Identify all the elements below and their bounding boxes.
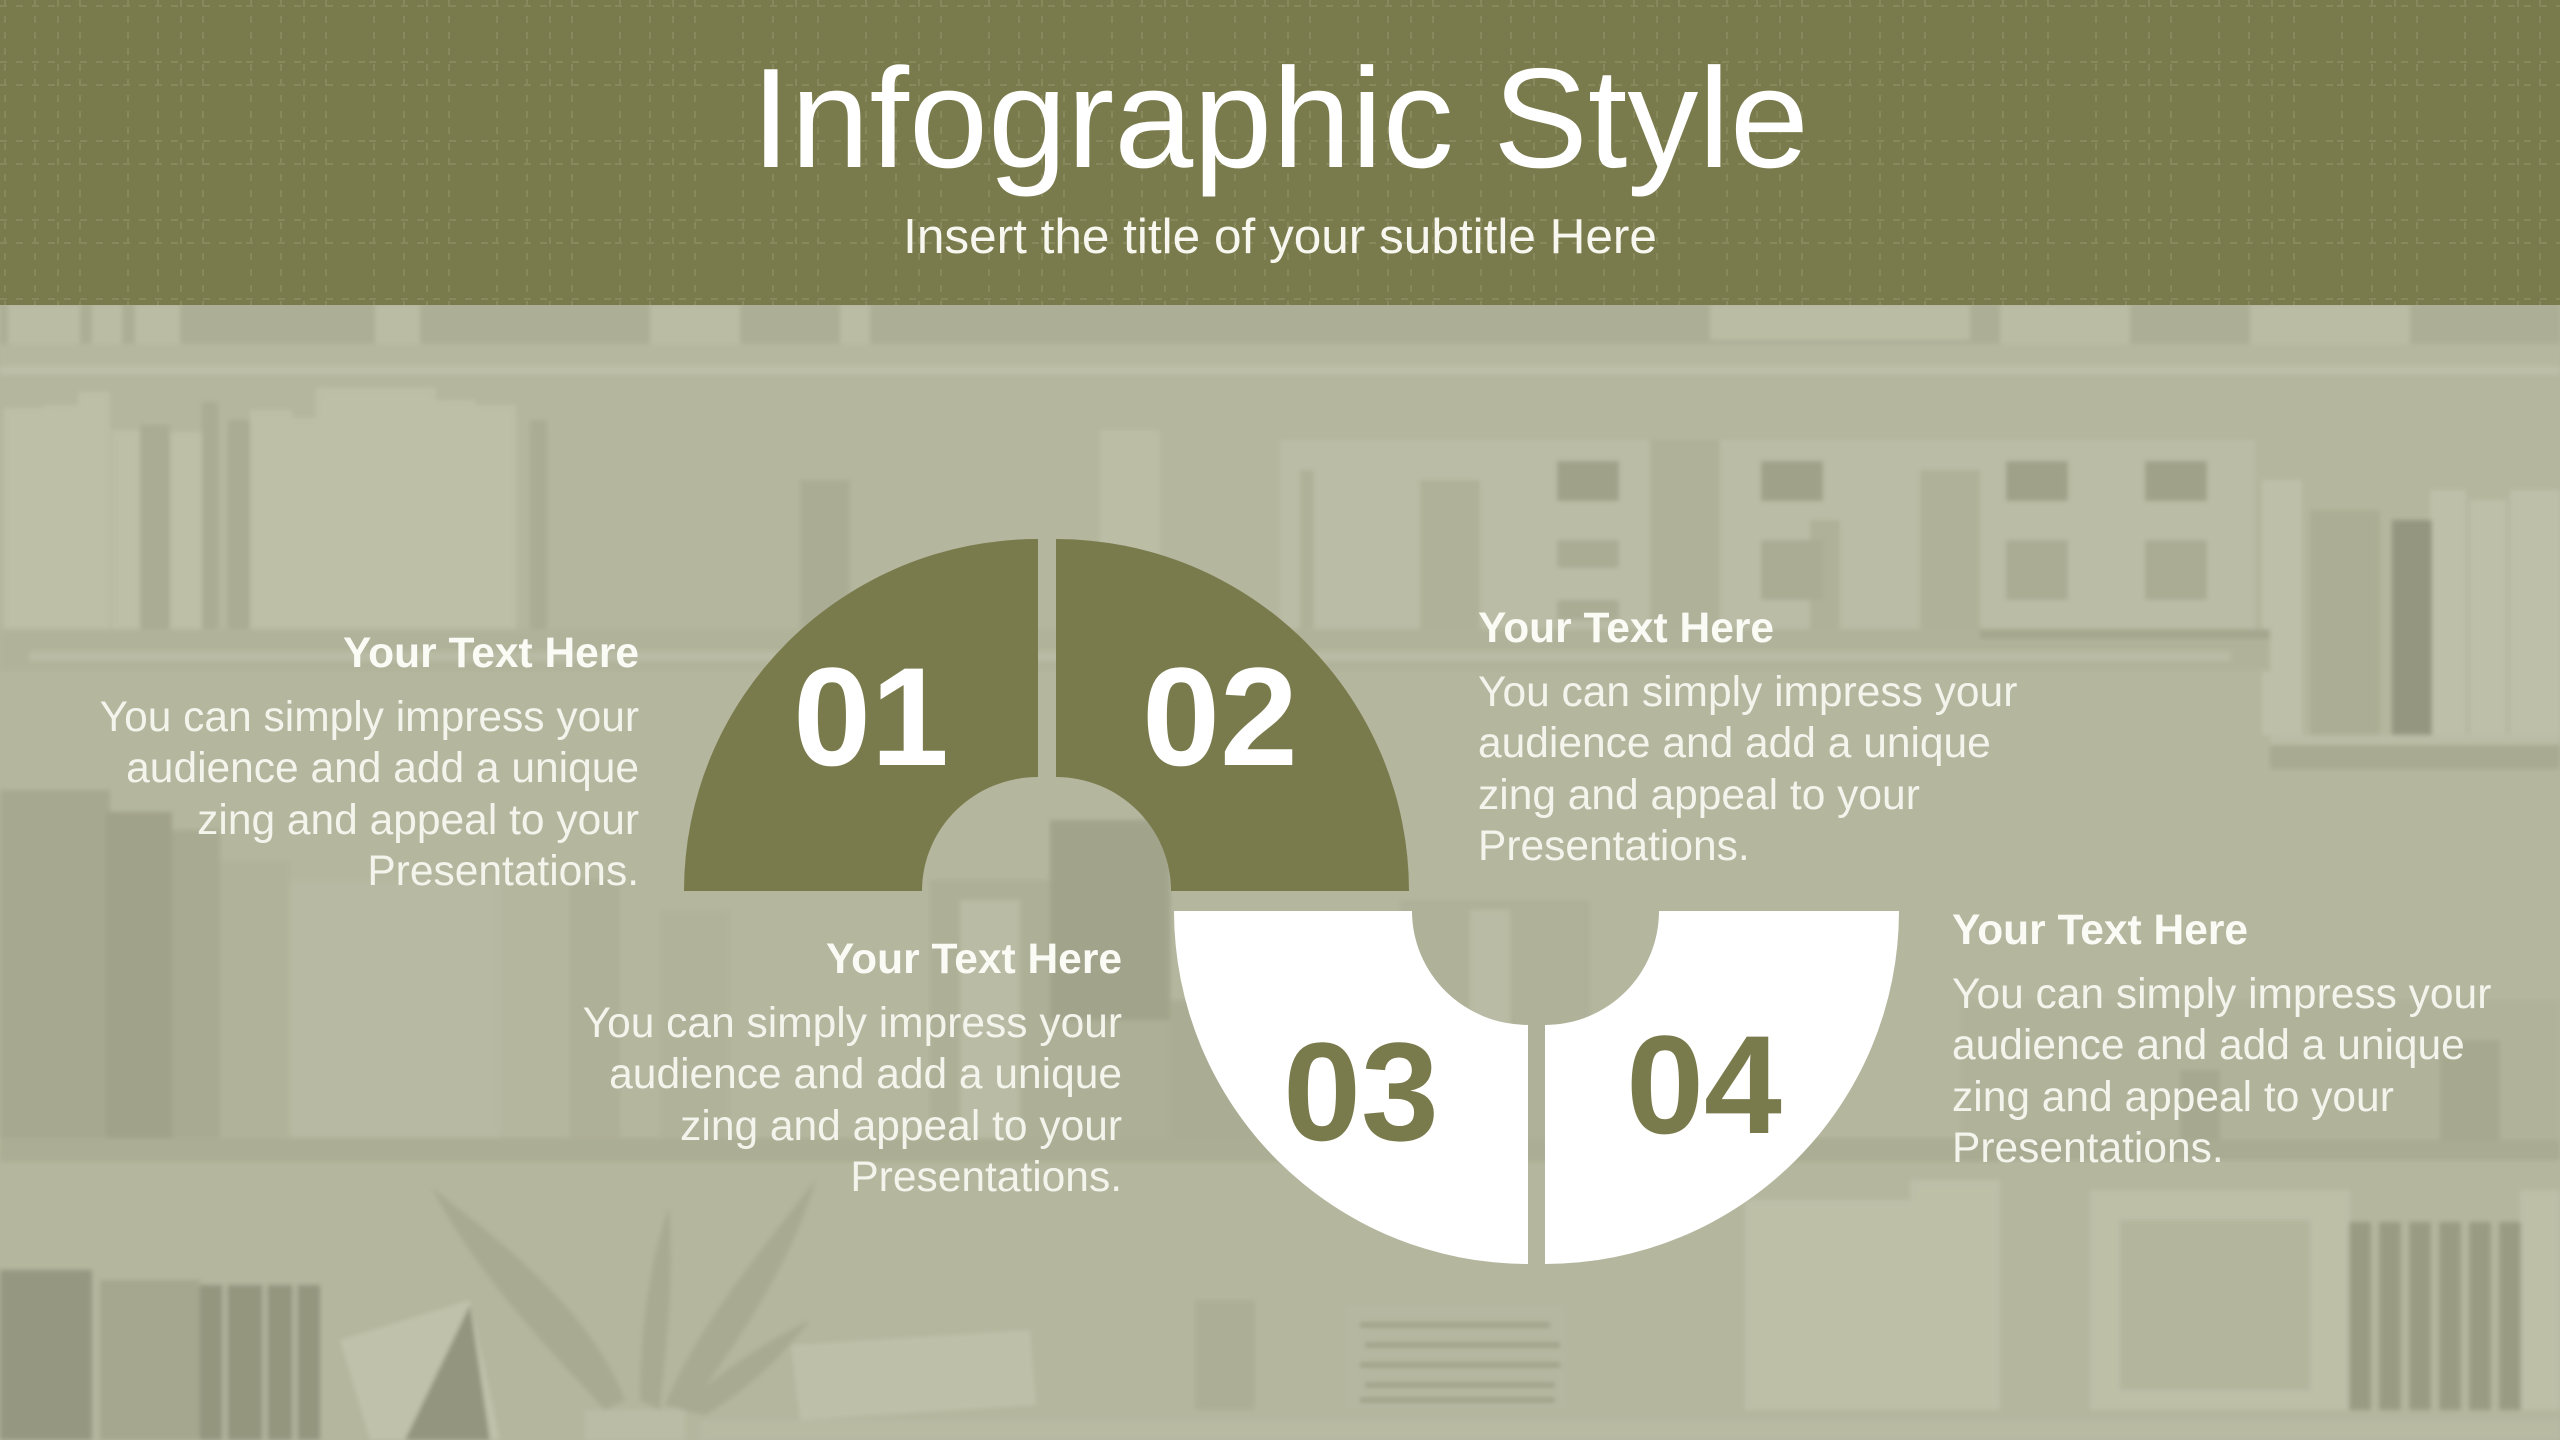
subtitle: Insert the title of your subtitle Here [903,209,1657,264]
bottom band [700,1420,2560,1440]
text block 01 [100,630,639,895]
right middle books and shelf [1960,1000,2560,1160]
segment 03 [1174,911,1528,1264]
far right books [2262,480,2560,769]
segment 01 [684,539,1038,891]
text block 01: Your Text Here [343,630,639,677]
segment 01: 01 [793,638,949,795]
title: Infographic Style [751,39,1809,198]
third shelf [0,1138,2000,1162]
text block 04: zing and appeal to your [1952,1074,2394,1121]
segment 04: 04 [1626,1006,1782,1163]
upper right books [1280,440,2255,630]
text block 04: Presentations. [1952,1125,2224,1172]
jar [1195,1300,1255,1410]
text block 03: Presentations. [850,1154,1122,1201]
text block 03: You can simply impress your [583,1000,1122,1047]
ornament on upper shelf [800,480,850,630]
text block 02: zing and appeal to your [1478,772,1920,819]
text block 03 [583,936,1122,1201]
text block 02: You can simply impress your [1478,669,2017,716]
text block 03: Your Text Here [826,936,1122,983]
second shelf [0,629,2270,671]
segmented arch: upper olive half [684,539,1409,891]
text block 04: You can simply impress your [1952,971,2491,1018]
text block 01: You can simply impress your [100,694,639,741]
lower band behind arch [1400,900,1590,1140]
text block 01: Presentations. [367,848,639,895]
segment 02 [1056,539,1409,891]
background: bookshelf photo [0,300,2560,1440]
text block 01: zing and appeal to your [197,797,639,844]
header band [0,0,2560,305]
text block 02: audience and add a unique [1478,720,1991,767]
text block 02: Presentations. [1478,823,1750,870]
lower left books [0,1270,500,1440]
text block 02 [1478,605,2017,870]
segment 02: 02 [1142,638,1298,795]
text block 01: audience and add a unique [126,745,639,792]
text block 03: audience and add a unique [609,1051,1122,1098]
top shelf strip [0,300,2560,376]
plant in pot [432,1179,816,1440]
segment 03: 03 [1283,1013,1439,1170]
book stack [791,1330,1036,1420]
text block 02: Your Text Here [1478,605,1774,652]
upper left books [4,388,547,629]
text block 04: audience and add a unique [1952,1022,2465,1069]
text block 03: zing and appeal to your [680,1103,1122,1150]
text block 04: Your Text Here [1952,907,2248,954]
text block 04 [1952,907,2491,1172]
segment 04 [1545,911,1899,1264]
middle left books [0,790,1260,1138]
segmented arch: lower white half [1174,911,1899,1264]
lower right books [1345,1180,2560,1410]
